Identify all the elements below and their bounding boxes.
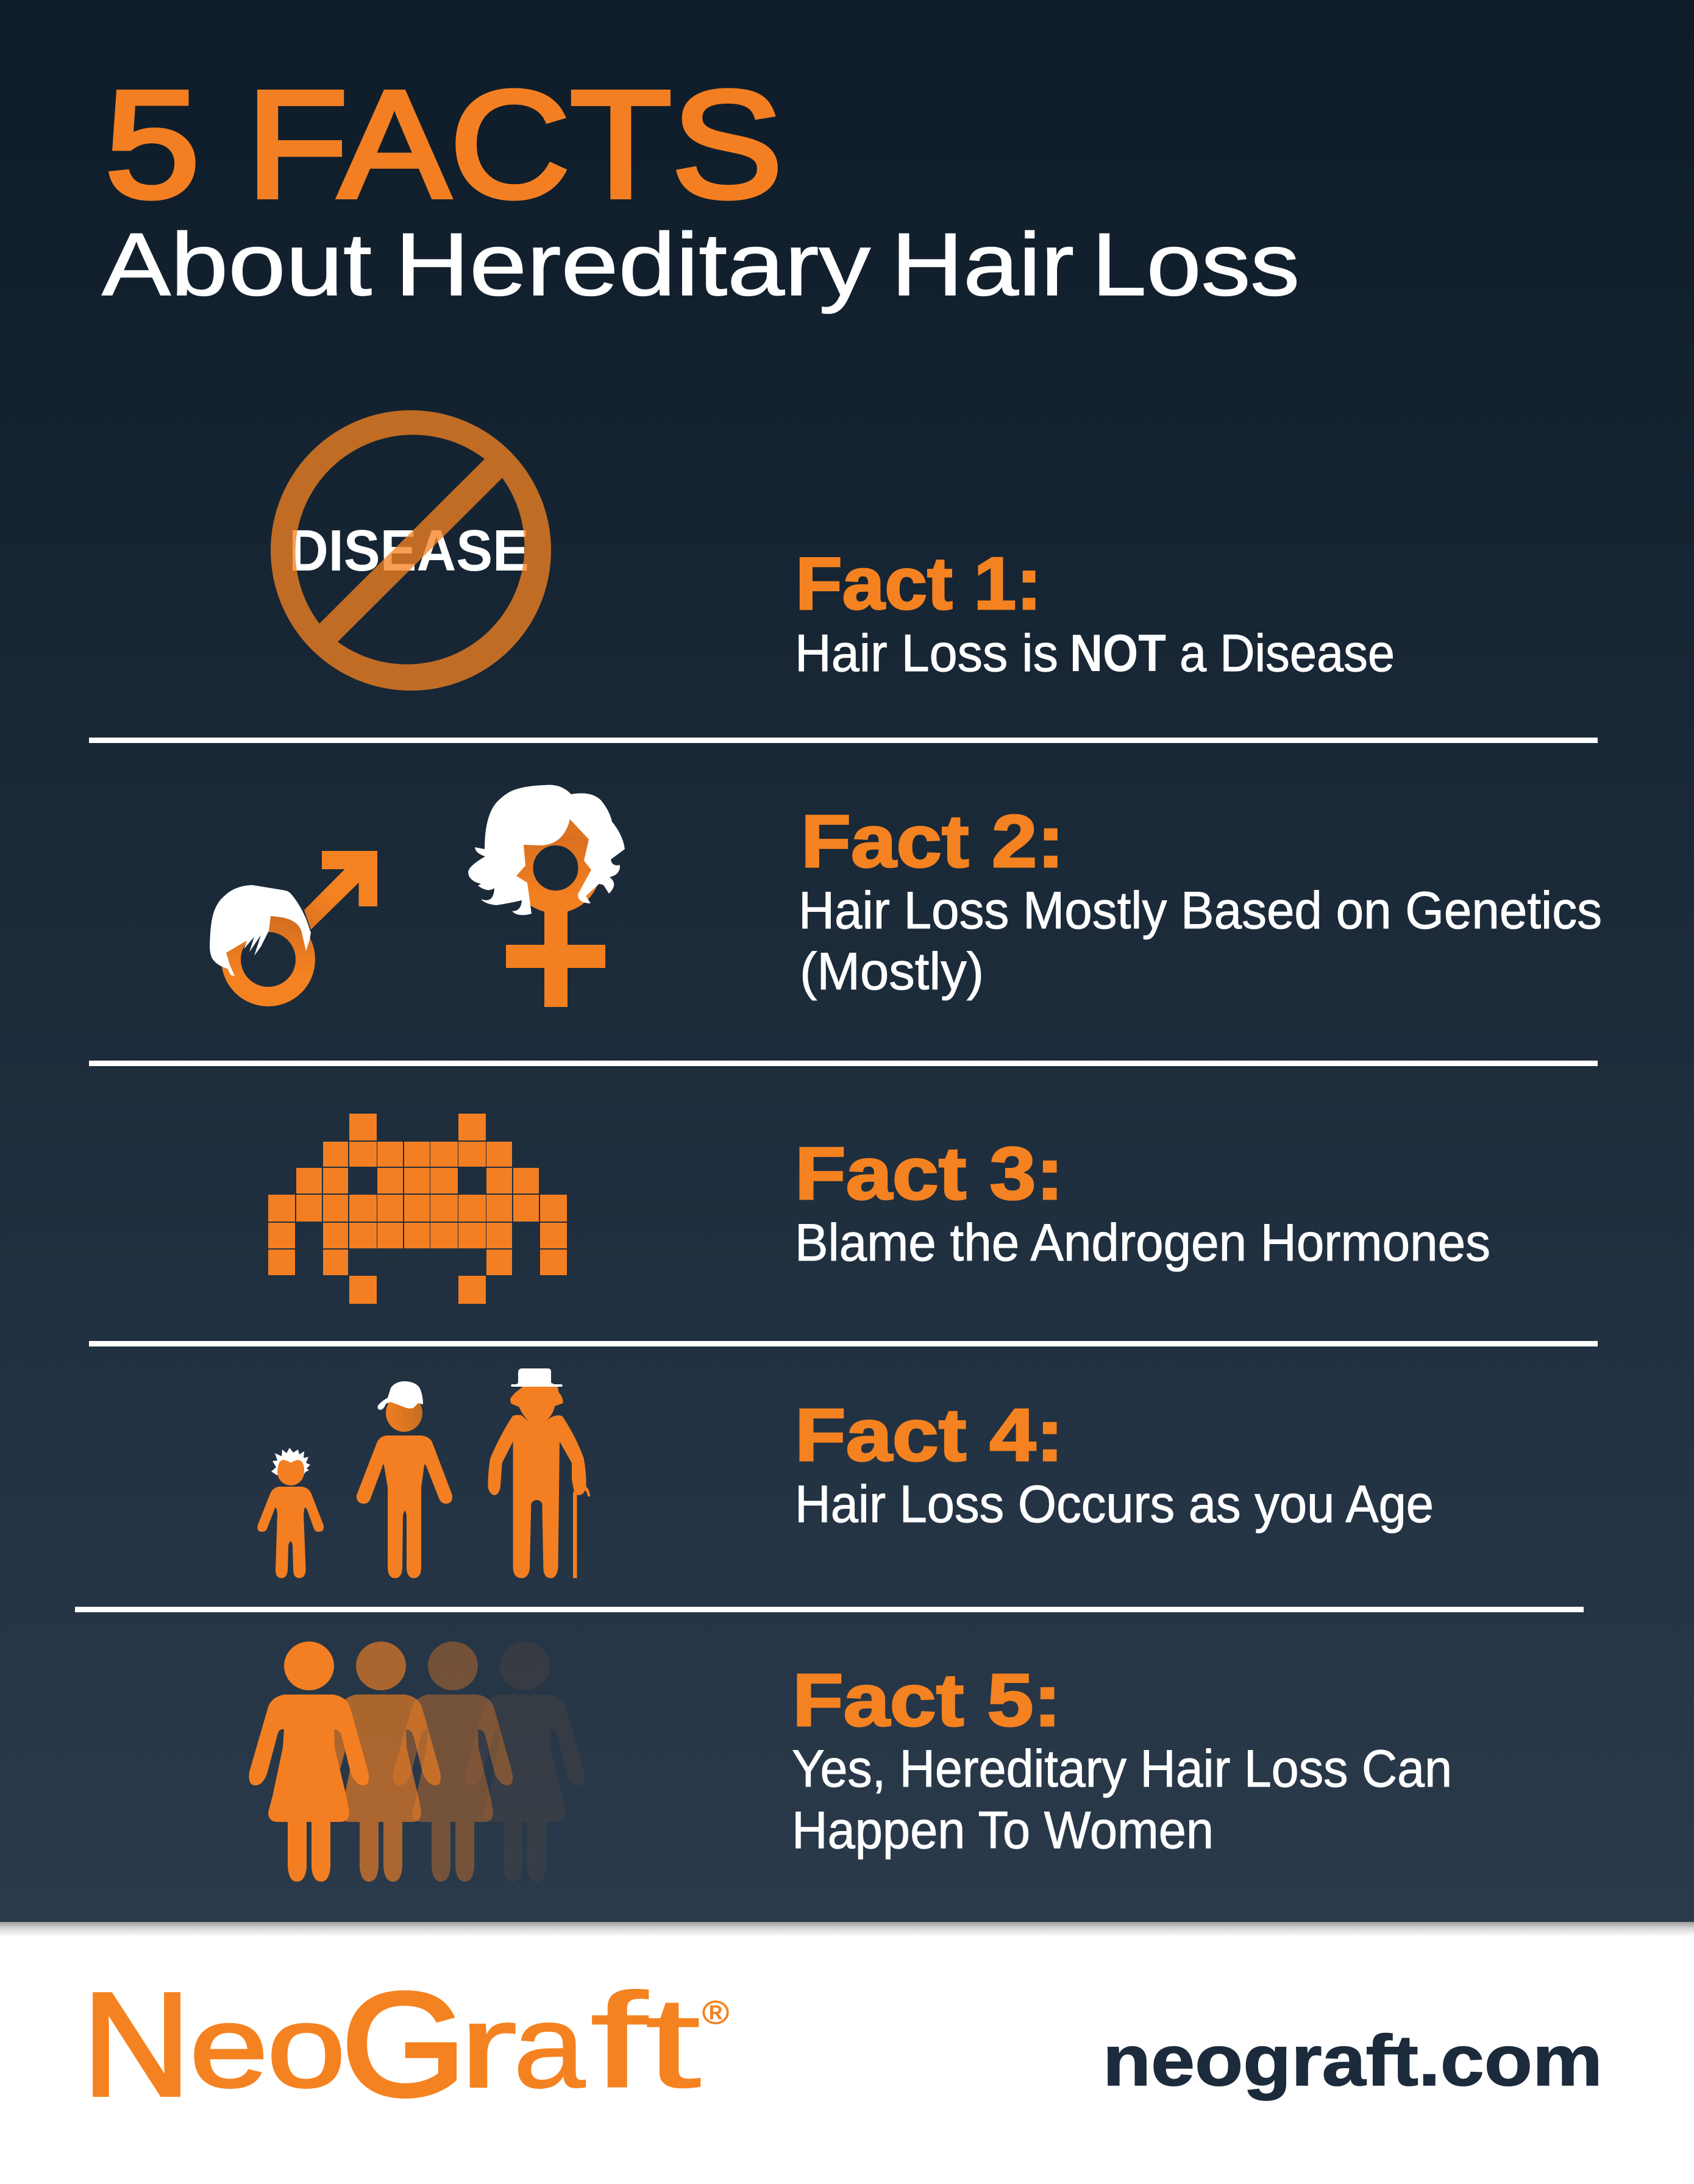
male arrow — [304, 851, 377, 930]
fact 2 heading: Fact 2: — [801, 800, 1064, 883]
website url: neograft.com — [1103, 2021, 1603, 2101]
adult head — [386, 1394, 422, 1432]
fact 3 text — [795, 1132, 1490, 1272]
fact 1 description: a Disease — [1180, 624, 1395, 683]
subtitle: Loss — [1092, 215, 1300, 314]
fact 2 text — [799, 800, 1602, 1001]
icon: no disease prohibition sign — [271, 410, 551, 691]
icon: child, adult and elderly figures — [257, 1368, 590, 1578]
adult body — [357, 1435, 452, 1578]
icon: female symbol with curly hair — [468, 785, 625, 1007]
NeoGraft logo: N — [82, 1963, 191, 2127]
NeoGraft logo: ® — [702, 1994, 729, 2031]
child spiky hair — [271, 1448, 310, 1475]
adult cap — [378, 1381, 423, 1410]
subtitle — [102, 215, 1300, 314]
title block — [102, 59, 1300, 314]
title: 5 FACTS: FACTS — [246, 59, 783, 229]
NeoGraft logo: o — [267, 1982, 346, 2111]
NeoGraft logo: f — [589, 1965, 648, 2116]
child body — [257, 1487, 324, 1578]
fact 4 text — [795, 1393, 1434, 1534]
elderly body — [488, 1387, 586, 1578]
fact 4 heading: Fact 4: — [795, 1393, 1064, 1476]
NeoGraft logo: G — [341, 1963, 466, 2127]
fact 5 text — [792, 1659, 1452, 1860]
icon: pixel space invader hormone — [268, 1114, 567, 1304]
fact 1 description — [795, 624, 1395, 683]
fact 4 description: Hair Loss Occurs as you Age — [795, 1475, 1434, 1534]
female ring — [522, 834, 589, 902]
subtitle: Hereditary — [395, 215, 870, 314]
elderly figure with hat and cane — [488, 1368, 590, 1578]
male hair — [210, 885, 311, 976]
elderly cane — [573, 1487, 590, 1578]
female cross — [506, 908, 605, 1007]
fact 3 heading: Fact 3: — [795, 1132, 1064, 1215]
title: 5 FACTS: 5 — [105, 59, 200, 229]
NeoGraft logo: a — [513, 1980, 586, 2113]
female face fill behind hair — [523, 818, 590, 844]
fact 3 description: Blame the Androgen Hormones — [795, 1214, 1490, 1272]
prohibition ring and bar — [271, 410, 551, 691]
footer top shadow — [0, 1922, 1694, 1937]
subtitle: About — [102, 215, 372, 314]
male ring — [231, 922, 305, 997]
icon: four fading women figures — [249, 1642, 585, 1882]
NeoGraft logo — [82, 1963, 729, 2127]
subtitle: Hair — [891, 215, 1074, 314]
fact 1 text — [795, 542, 1395, 683]
divider 4 — [75, 1607, 1584, 1612]
NeoGraft logo: t — [644, 1970, 702, 2115]
fact 2 description: Hair Loss Mostly Based on Genetics — [799, 881, 1602, 940]
fact 5 description: Yes, Hereditary Hair Loss Can — [792, 1740, 1452, 1798]
NeoGraft logo: r — [458, 1980, 518, 2113]
child head — [277, 1460, 304, 1485]
divider 3 — [89, 1341, 1598, 1346]
female hair — [468, 785, 625, 915]
fact 5 description: Happen To Women — [792, 1801, 1214, 1860]
icon: male symbol with short hair — [210, 851, 377, 997]
fact 1 description: Hair Loss is — [795, 624, 1058, 683]
fact 1 description: NOT — [1070, 624, 1166, 683]
white footer background — [0, 1922, 1694, 2184]
fact 2 description: (Mostly) — [800, 942, 984, 1001]
fact 5 description — [792, 1740, 1452, 1860]
disease word: DISEASE — [289, 518, 529, 583]
adult figure — [357, 1381, 452, 1578]
NeoGraft logo: e — [190, 1982, 268, 2111]
fact 1 heading: Fact 1: — [795, 542, 1042, 625]
divider 1 — [89, 738, 1598, 743]
elderly hat — [511, 1368, 563, 1387]
divider 2 — [89, 1061, 1598, 1066]
fact 5 heading: Fact 5: — [792, 1659, 1061, 1741]
child figure — [257, 1448, 324, 1578]
fact 2 description — [799, 881, 1602, 1001]
